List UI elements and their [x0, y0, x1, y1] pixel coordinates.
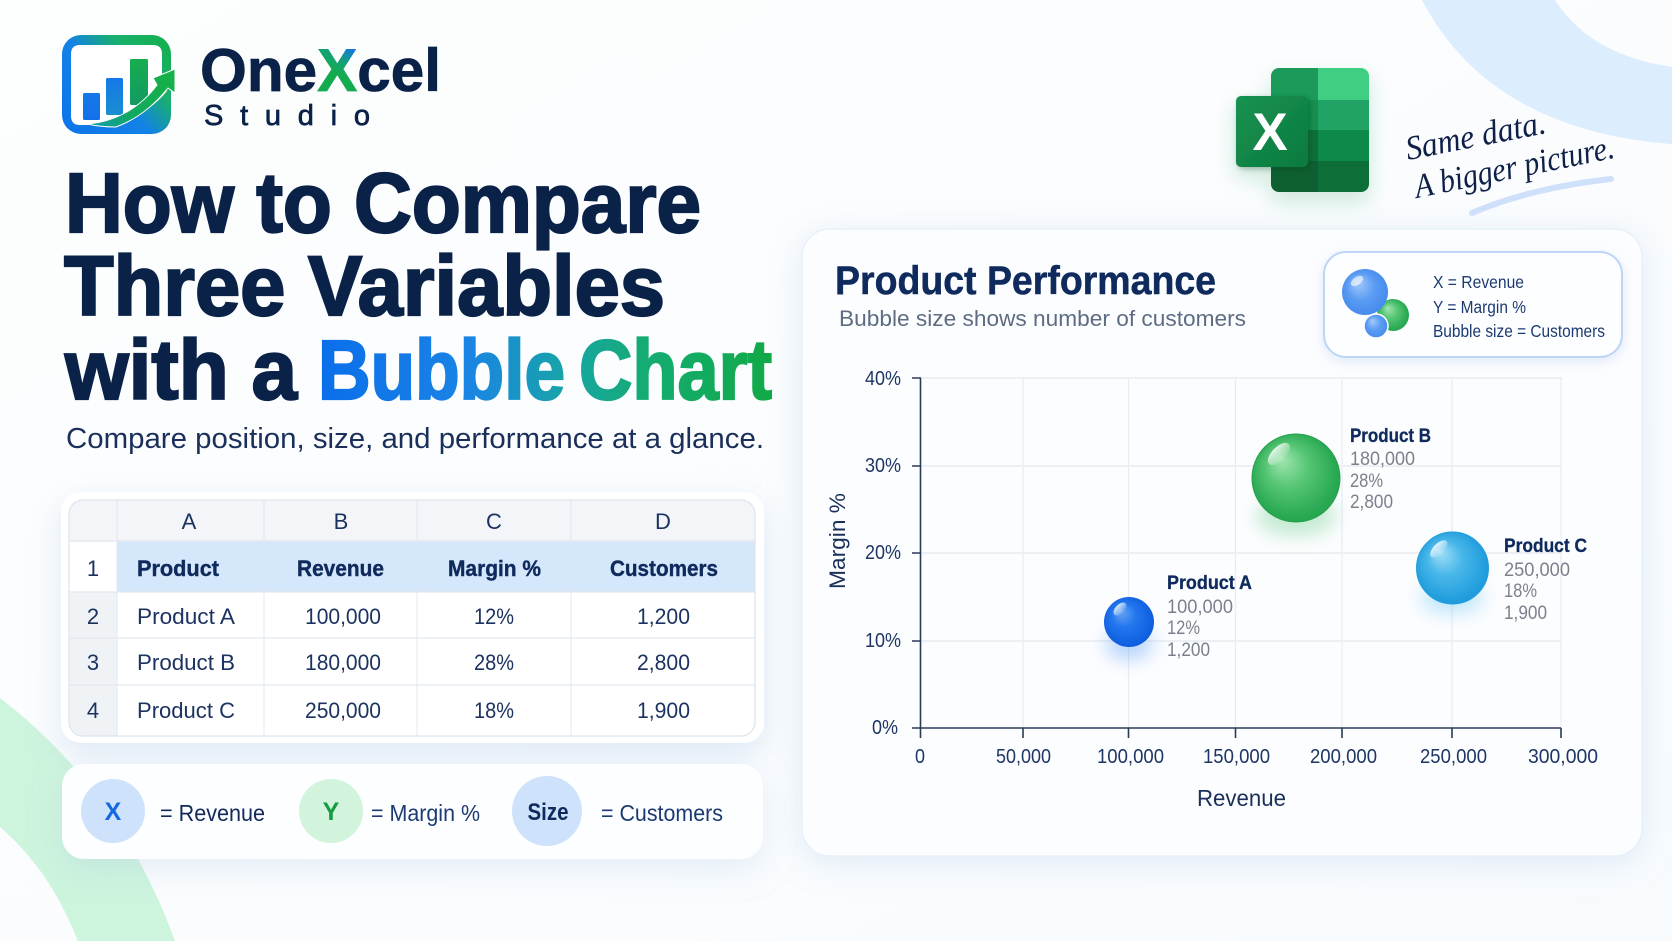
x axis labels: 150,000 [1203, 746, 1270, 768]
tagline [1402, 104, 1618, 213]
title [64, 156, 772, 417]
key: X: = Revenue [160, 800, 265, 826]
header row: Revenue [297, 556, 384, 581]
data rows: Product A [137, 604, 235, 629]
bubble: Product A [1104, 597, 1154, 660]
data rows: Product B [137, 650, 235, 675]
title: How to Compare [65, 156, 701, 250]
data rows: 28% [474, 650, 514, 675]
y axis labels: 0% [872, 717, 898, 739]
x axis labels [915, 746, 1598, 768]
icon: Excel logo [1236, 68, 1369, 192]
key: Size [512, 776, 723, 846]
label: Product A: Product A [1167, 573, 1252, 594]
key: X: X [105, 798, 122, 826]
label: Product B: 180,000 [1350, 449, 1415, 470]
bubble: Product B [1252, 434, 1340, 536]
title: Bubble [318, 323, 565, 417]
key: X [81, 779, 265, 843]
data rows: 250,000 [305, 698, 381, 723]
key: Y [299, 779, 480, 843]
chart plot [825, 368, 1598, 811]
label: Product C: Product C [1504, 536, 1587, 557]
label: Product C: 18% [1504, 581, 1537, 602]
icon: Excel logo: X [1252, 103, 1288, 162]
legend box [1324, 252, 1622, 357]
label: Product C: 1,900 [1504, 603, 1547, 624]
header row: Customers [610, 556, 718, 581]
row numbers: 1 [87, 556, 99, 581]
brand name: OneXcel [200, 37, 441, 104]
data rows: 100,000 [305, 604, 381, 629]
label: Product B: 2,800 [1350, 492, 1393, 513]
y axis labels: 10% [865, 630, 901, 652]
row numbers: 2 [87, 604, 99, 629]
x axis labels: 250,000 [1420, 746, 1487, 768]
bubble: Product C [1416, 532, 1488, 614]
x axis labels: 0 [915, 746, 925, 768]
label: Product B: Product B [1350, 426, 1431, 447]
decorative arc: blue [1422, 0, 1672, 144]
x axis title: Revenue [1197, 785, 1286, 811]
data rows: Product C [137, 698, 235, 723]
label: Product A: 1,200 [1167, 640, 1210, 661]
x axis labels: 100,000 [1097, 746, 1164, 768]
decorative arc: green [0, 698, 175, 941]
handwritten note line 1: Same data. [1402, 104, 1549, 168]
y axis labels [865, 368, 901, 739]
y axis labels: 30% [865, 455, 901, 477]
y axis labels: 20% [865, 542, 901, 564]
brand sub name: Studio [204, 100, 370, 132]
legend text: Bubble size = Customers [1433, 321, 1605, 341]
x axis labels: 50,000 [996, 746, 1051, 768]
y axis labels: 40% [865, 368, 901, 390]
legend text [1433, 272, 1605, 341]
label: Product B [1350, 426, 1431, 513]
data rows: 12% [474, 604, 514, 629]
title: Chart [579, 323, 772, 417]
key: Y: = Margin % [371, 800, 480, 826]
key: Y: Y [323, 798, 340, 826]
header row: Margin % [448, 556, 541, 581]
key: Size: = Customers [601, 800, 723, 826]
title: with a [64, 323, 298, 417]
logo icon [62, 35, 175, 134]
row numbers: 4 [87, 698, 99, 723]
column headers: B [334, 509, 348, 534]
column headers [182, 509, 671, 534]
label: Product C: 250,000 [1504, 560, 1570, 581]
data rows: 2,800 [637, 650, 690, 675]
table grid [69, 500, 755, 736]
panel: spreadsheet table [61, 492, 764, 743]
x axis labels: 300,000 [1528, 746, 1598, 768]
title: Three Variables [64, 239, 665, 333]
label: Product C [1504, 536, 1587, 624]
x axis labels: 200,000 [1310, 746, 1377, 768]
axes [912, 378, 1561, 738]
data rows [137, 604, 690, 723]
row numbers [87, 556, 99, 723]
row numbers: 3 [87, 650, 99, 675]
chart subheading: Bubble size shows number of customers [839, 306, 1246, 331]
panel: axis key [62, 764, 763, 859]
data rows: 180,000 [305, 650, 381, 675]
header row: Product [137, 556, 220, 581]
chart heading: Product Performance [835, 259, 1216, 303]
label: Product A [1167, 573, 1252, 661]
underline stroke [1472, 179, 1611, 213]
column headers: D [655, 509, 671, 534]
label: Product B: 28% [1350, 471, 1383, 492]
header row [137, 556, 718, 581]
label: Product A: 100,000 [1167, 597, 1233, 618]
column headers: A [182, 509, 197, 534]
legend bubbles [1342, 269, 1409, 338]
y axis title: Margin % [825, 493, 850, 589]
legend text: Y = Margin % [1433, 297, 1526, 317]
column headers: C [486, 509, 502, 534]
legend text: X = Revenue [1433, 272, 1524, 292]
data rows: 1,900 [637, 698, 690, 723]
subtitle: Compare position, size, and performance at a glance. [66, 423, 764, 455]
data rows: 18% [474, 698, 514, 723]
key: Size: Size [528, 799, 568, 826]
panel: bubble chart [802, 229, 1642, 856]
logo [62, 35, 441, 134]
data rows: 1,200 [637, 604, 690, 629]
label: Product A: 12% [1167, 618, 1200, 639]
handwritten note line 2: A bigger picture. [1409, 129, 1618, 206]
